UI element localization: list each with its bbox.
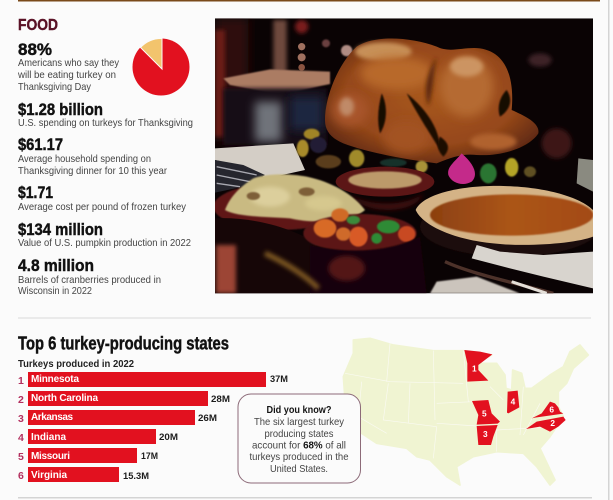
bar: Minnesota: 37M — [270, 374, 288, 385]
pumpkin pie — [416, 186, 600, 257]
mashed potatoes — [213, 174, 365, 230]
bar: Virginia — [18, 467, 149, 482]
bar: Minnesota: Minnesota — [31, 374, 79, 385]
state: Arkansas — [477, 425, 498, 445]
map: top turkey states — [342, 338, 590, 486]
bar: Missouri: 17M — [141, 451, 158, 462]
stat: pumpkin production — [18, 220, 191, 249]
stat: cranberries: Wisconsin in 2022 — [18, 285, 92, 297]
bar: North Carolina: 2 — [18, 394, 24, 406]
bar: Minnesota: 1 — [18, 375, 24, 387]
panel: food facts — [17, 17, 193, 297]
stuffing bowl — [336, 167, 434, 210]
stat: 88 percent: Thanksgiving Day — [18, 81, 92, 93]
bar: Virginia: Virginia — [31, 470, 67, 481]
vegetable bowl — [215, 208, 427, 293]
bar: Minnesota — [18, 372, 288, 387]
bar: Virginia: 6 — [18, 470, 24, 482]
table cloth and knife — [430, 245, 593, 293]
bar chart: turkeys produced — [18, 372, 288, 482]
bar: Missouri — [18, 448, 158, 463]
stat: cranberries — [18, 256, 161, 297]
stat: household spending — [18, 135, 167, 177]
stat: pumpkin production: $134 million — [18, 220, 103, 239]
stat: household spending: Thanksgiving dinner for 10 this year — [18, 165, 167, 177]
stat: frozen turkey cost: Average cost per pound of frozen turkey — [18, 201, 187, 213]
stat: 88 percent: Americans who say they — [18, 57, 120, 69]
callout: did you know: Did you know? — [266, 404, 332, 416]
state: North Carolina — [526, 417, 566, 432]
bar: North Carolina — [18, 391, 230, 406]
heading: top 6 states: Top 6 turkey-producing states — [18, 334, 229, 354]
stat: 88 percent: 88% — [18, 40, 52, 59]
stat: turkey spending — [18, 100, 193, 129]
state: Missouri: 5 — [482, 408, 487, 418]
stat: frozen turkey cost: $1.71 — [18, 183, 53, 202]
US base map — [343, 338, 588, 485]
callout: did you know — [238, 394, 360, 483]
stat: cranberries: 4.8 million — [18, 256, 94, 275]
state: Indiana: 4 — [511, 396, 516, 406]
bar: Indiana: Indiana — [31, 432, 66, 443]
state: Missouri — [472, 400, 500, 425]
bar: Missouri: 5 — [18, 451, 24, 463]
bar: Arkansas: 3 — [18, 413, 24, 425]
bar: North Carolina: 28M — [211, 394, 230, 405]
bar: Arkansas: 26M — [198, 413, 217, 424]
bar: Arkansas — [18, 410, 217, 425]
state: Minnesota — [464, 350, 492, 382]
callout: did you know: producing states — [264, 428, 334, 440]
turkey — [325, 39, 538, 163]
chart subtitle: Turkeys produced in 2022 — [18, 358, 134, 370]
callout: did you know: turkeys produced in the — [250, 451, 349, 463]
stat: frozen turkey cost — [18, 183, 187, 213]
bar: Virginia: 15.3M — [123, 471, 149, 482]
state: Virginia: 6 — [549, 404, 554, 414]
stat: turkey spending: $1.28 billion — [18, 100, 103, 119]
stat: household spending: $61.17 — [18, 135, 63, 154]
bar: Indiana — [18, 429, 178, 444]
state: Virginia — [532, 402, 563, 418]
stat: pumpkin production: Value of U.S. pumpkin production in 2022 — [18, 237, 191, 249]
callout: did you know: The six largest turkey — [254, 416, 345, 428]
callout: did you know: account for 68% of all — [252, 440, 346, 452]
pie chart: 88 percent — [132, 38, 190, 96]
state: Minnesota: 1 — [472, 364, 477, 374]
stat: 88 percent — [17, 40, 120, 93]
state: Arkansas: 3 — [483, 429, 488, 439]
state: North Carolina: 2 — [550, 418, 555, 428]
bar: Missouri: Missouri — [31, 451, 70, 462]
bar: Indiana: 20M — [159, 432, 178, 443]
illustration: Thanksgiving dinner photo — [215, 18, 593, 294]
state: Indiana — [507, 391, 519, 413]
stat: household spending: Average household spending on — [18, 153, 151, 165]
stat: cranberries: Barrels of cranberries produced in — [18, 274, 161, 286]
stat: turkey spending: U.S. spending on turkeys for Thanksgiving — [18, 117, 193, 129]
bar: Arkansas: Arkansas — [31, 412, 73, 423]
bar: Indiana: 4 — [18, 432, 24, 444]
callout: did you know: United States. — [270, 463, 328, 475]
garnish — [297, 129, 536, 184]
bar: North Carolina: North Carolina — [31, 393, 98, 404]
napkins — [215, 143, 305, 178]
stat: 88 percent: will be eating turkey on — [17, 69, 116, 81]
heading: food: FOOD — [18, 17, 58, 34]
